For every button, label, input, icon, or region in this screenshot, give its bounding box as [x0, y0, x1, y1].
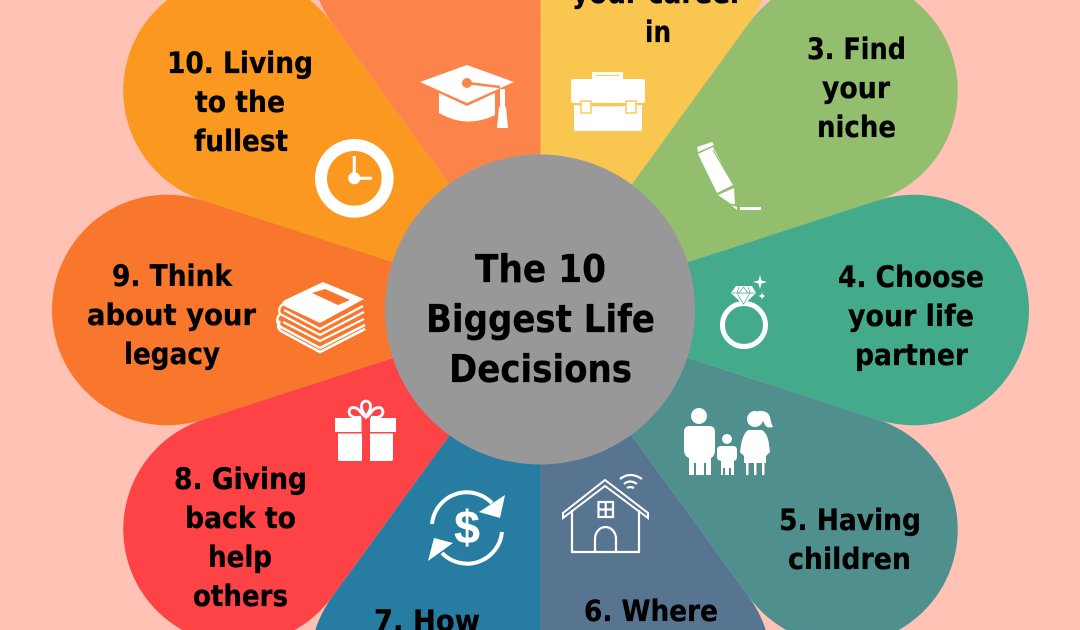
title: Decisions — [449, 347, 632, 391]
title: The 10 — [475, 247, 606, 291]
text: petal 9 label: 9. Think — [112, 259, 233, 293]
text: petal 9 label: legacy — [124, 337, 220, 371]
text: petal 8 label: help — [208, 540, 272, 574]
text: petal 10 label: fullest — [194, 124, 288, 158]
text: petal 4 label — [838, 260, 984, 372]
text: petal 8 label — [174, 462, 307, 613]
text: petal 5 label: children — [788, 542, 911, 576]
icon: diamond ring — [722, 275, 767, 346]
icon: smart house — [563, 475, 648, 552]
panel: petal 1 — [280, 0, 650, 346]
icon: marker pen — [697, 142, 761, 210]
panel: petal 9 — [52, 195, 540, 425]
center circle — [385, 154, 695, 464]
text: petal 10 label: to the — [195, 85, 285, 119]
icon: stack of books — [277, 282, 365, 352]
panel: petal 2 — [431, 0, 801, 346]
icon: briefcase — [571, 72, 645, 131]
text: petal 4 label: your life — [848, 299, 974, 333]
title: Biggest Life — [426, 297, 655, 341]
text: petal 9 label — [87, 259, 257, 371]
icon: money cycle: $ — [454, 501, 480, 553]
text: petal 8 label: back to — [185, 501, 296, 535]
panel: petal 6 — [431, 274, 801, 630]
text: petal 8 label: others — [193, 579, 288, 613]
panel: petal 3 — [473, 0, 1003, 403]
text: petal 5 label — [779, 503, 921, 576]
text: petal 4 label: 4. Choose — [838, 260, 984, 294]
icon: clock — [321, 145, 388, 212]
icon: family — [684, 408, 773, 475]
text: petal 10 label: 10. Living — [167, 46, 313, 80]
text: petal 3 label: niche — [817, 110, 896, 144]
panel: petal 4 — [540, 195, 1029, 425]
icon: graduation cap — [420, 65, 514, 128]
text: petal 9 label: about your — [87, 298, 257, 332]
text: petal 10 label — [167, 46, 313, 158]
text: petal 3 label — [807, 32, 906, 144]
panel: petal 8 — [78, 217, 608, 630]
text: petal 8 label: 8. Giving — [174, 462, 307, 496]
panel: petal 10 — [78, 0, 608, 403]
text: petal 2 label: in — [645, 15, 671, 49]
text: petal 2 label — [572, 0, 744, 49]
text: petal 5 label: 5. Having — [779, 503, 921, 537]
panel: petal 5 — [473, 217, 1003, 630]
text: petal 3 label: 3. Find — [807, 32, 906, 66]
icon: money cycle — [428, 492, 505, 564]
icon: gift box — [335, 401, 396, 461]
text: petal 6 label: 6. Where — [584, 594, 718, 628]
title — [426, 247, 655, 391]
text: petal 3 label: your — [822, 71, 891, 105]
text: petal 4 label: partner — [855, 338, 969, 372]
panel: petal 7 — [280, 274, 650, 630]
